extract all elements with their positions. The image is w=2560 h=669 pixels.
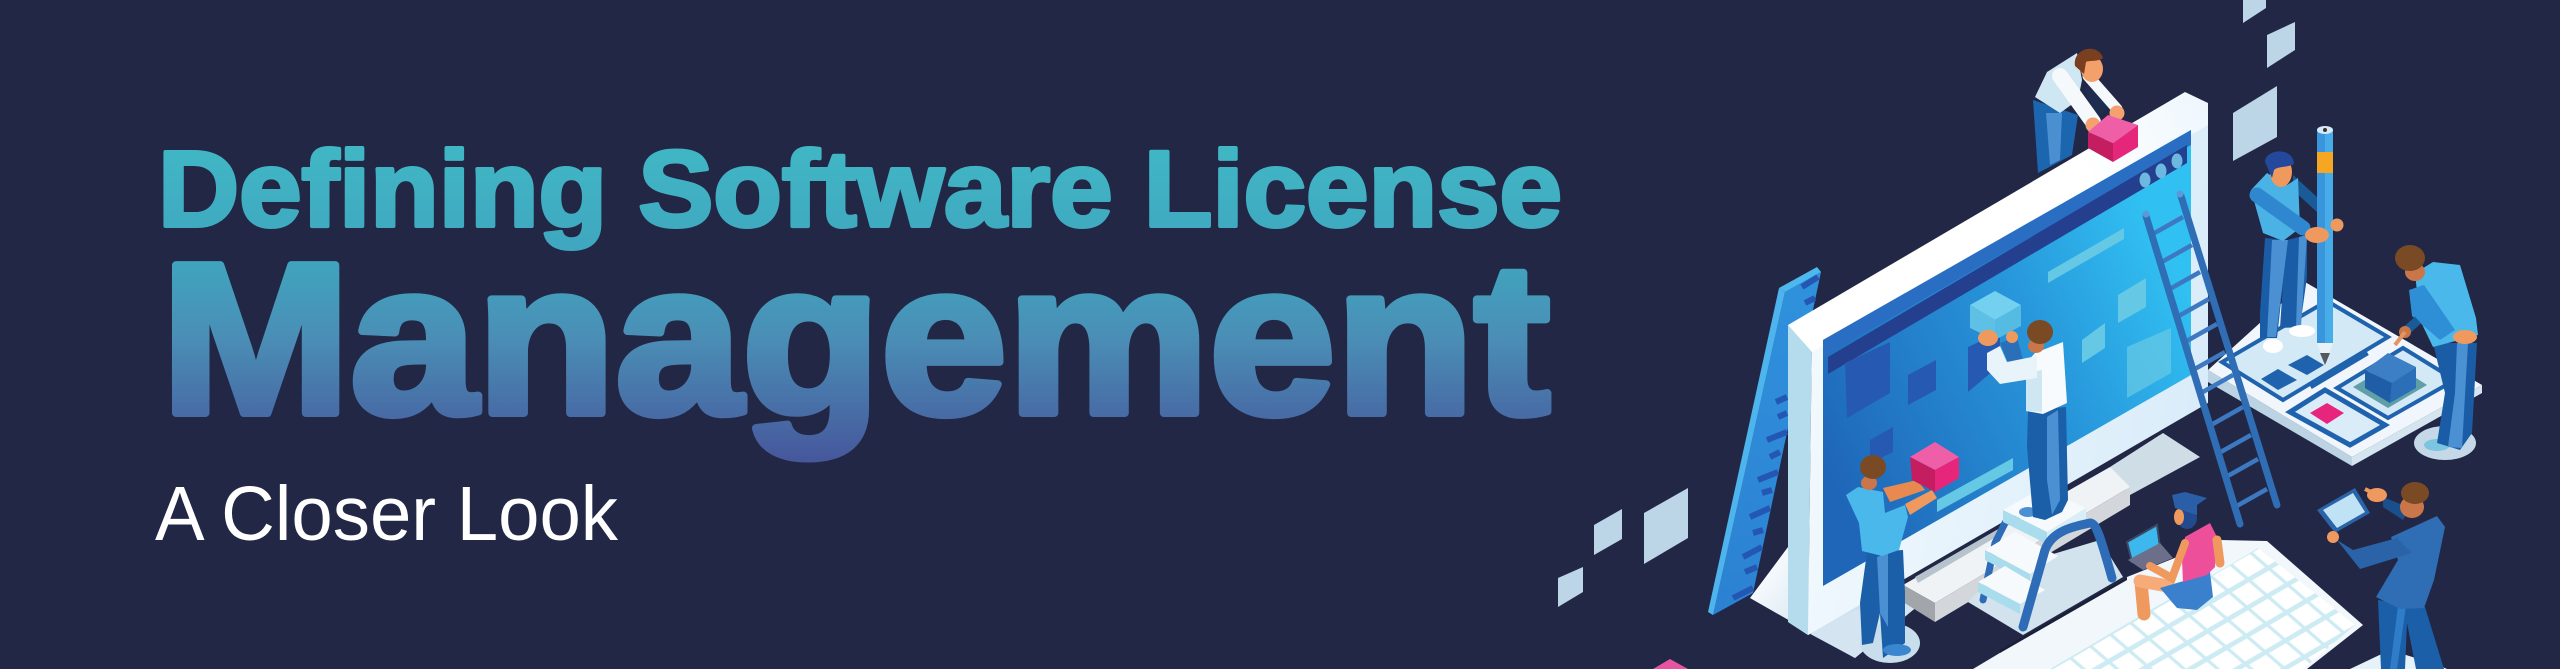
laptop bbox=[2127, 525, 2173, 570]
monitor base bbox=[1750, 547, 1925, 658]
man leaning over monitor with pink cube bbox=[2033, 49, 2138, 173]
man holding pencil bbox=[2251, 151, 2344, 353]
pink cube bbox=[1910, 442, 1959, 492]
floating squares: left bbox=[1558, 488, 1688, 607]
monitor screen bbox=[1823, 130, 2191, 586]
screen title bar bbox=[1828, 145, 2187, 374]
keys bbox=[2050, 548, 2355, 669]
pink panel bbox=[2290, 390, 2385, 445]
ladder bbox=[2142, 190, 2277, 524]
man bending over tile bbox=[2395, 245, 2478, 460]
floating squares: top bbox=[2233, 0, 2295, 161]
light blue cube bbox=[1970, 291, 2021, 340]
subheading: A Closer Look: A Closer Look bbox=[155, 471, 618, 557]
platform under suited man bbox=[2350, 650, 2447, 669]
standing disc bbox=[2414, 426, 2476, 460]
pink diamond at bottom edge bbox=[1653, 659, 1688, 669]
stool with steps bbox=[1978, 488, 2112, 627]
cube panel bbox=[2337, 348, 2455, 418]
heading: Management: Management bbox=[161, 218, 1550, 459]
floor patch under stool bbox=[1968, 540, 2123, 635]
monitor bbox=[1788, 92, 2208, 635]
monitor stand bbox=[1903, 433, 2200, 622]
tablet bbox=[2317, 488, 2370, 533]
man in suit with tablet bbox=[2317, 482, 2445, 669]
man with pink cube in blue shirt bbox=[1846, 442, 1959, 663]
heading: Defining Software License: Defining Software License bbox=[158, 128, 1562, 249]
pencil panel bbox=[2222, 301, 2388, 400]
girl with laptop bbox=[2127, 492, 2220, 614]
man on stool with white shirt bbox=[1978, 320, 2068, 520]
pink cube bbox=[2088, 115, 2138, 162]
floor tile with panels bbox=[2208, 282, 2482, 466]
pencil bbox=[2317, 126, 2333, 365]
keyboard bbox=[1973, 540, 2363, 669]
ruler bbox=[1708, 267, 1821, 615]
standing disc bbox=[1860, 623, 1920, 663]
